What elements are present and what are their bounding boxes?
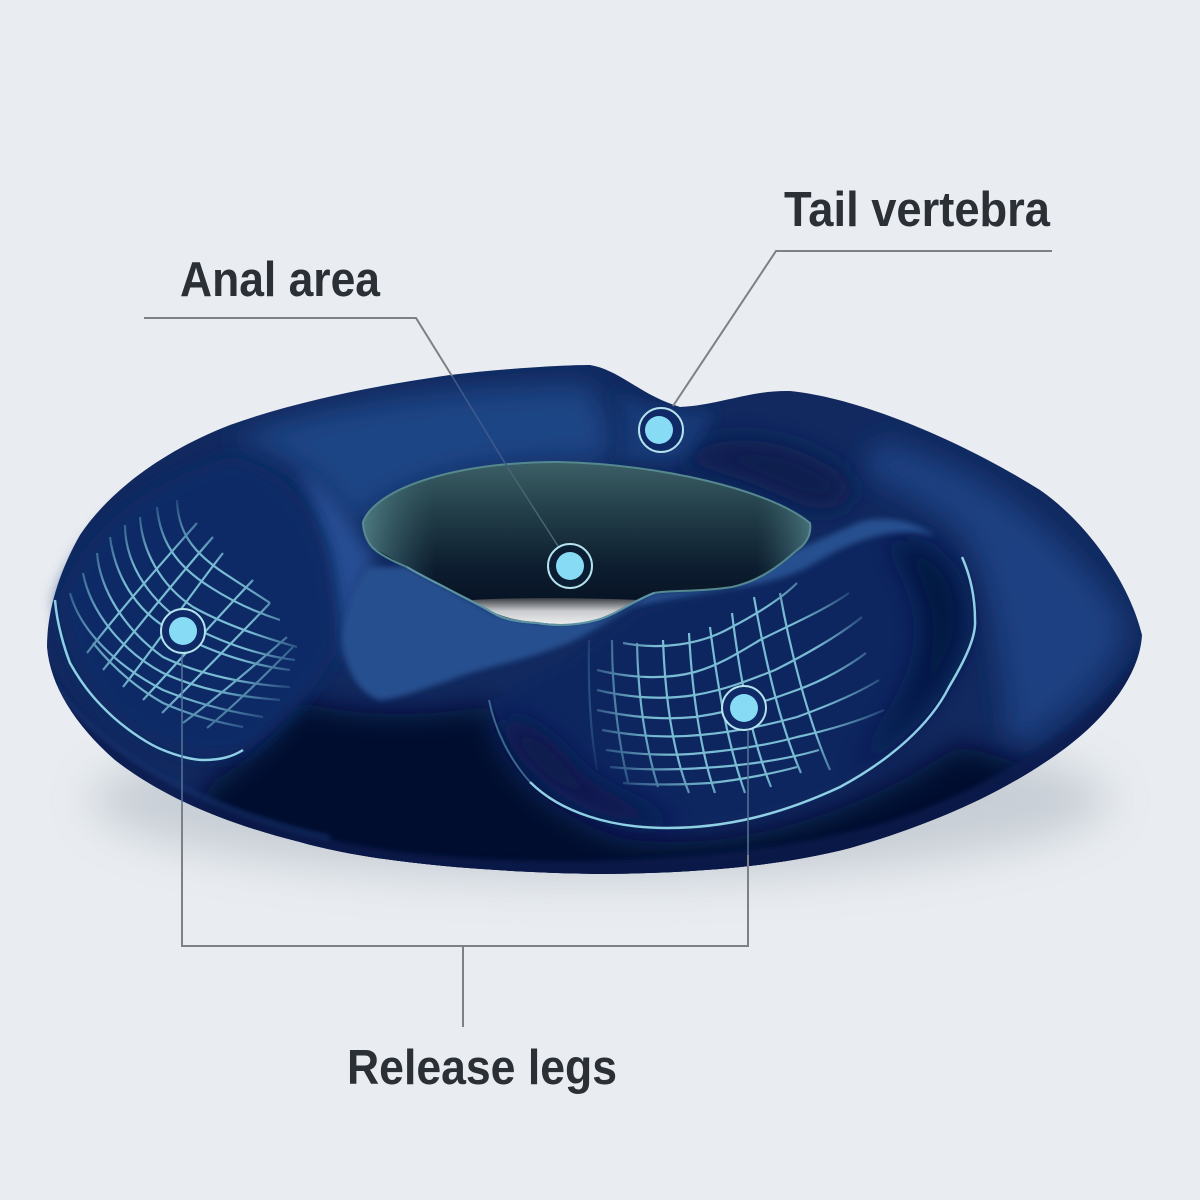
marker: anal area xyxy=(548,544,592,588)
tailbone notch xyxy=(618,394,712,466)
leader line: tail vertebra xyxy=(673,251,1052,406)
leader line: anal area inside opening xyxy=(508,468,558,546)
zipper band xyxy=(50,652,1140,874)
cushion xyxy=(47,365,1142,900)
leader line: anal area over cushion xyxy=(452,376,508,468)
opening side glow xyxy=(363,462,810,623)
left pad outline xyxy=(55,600,243,760)
dark valley right of tailbone xyxy=(680,440,852,509)
right hollow xyxy=(492,531,974,828)
front centre ridge xyxy=(342,519,936,700)
right pressure grid xyxy=(589,583,884,793)
bright left saddle xyxy=(300,470,375,670)
right pad outline xyxy=(530,557,975,828)
leader stem: release legs xyxy=(462,946,464,1027)
cushion shading xyxy=(47,385,1142,900)
anal area opening xyxy=(363,462,810,625)
dark lower front xyxy=(189,692,1036,874)
label: anal area: Anal area xyxy=(180,253,381,307)
left pressure grid xyxy=(70,500,297,728)
infographic canvas xyxy=(46,190,1142,1094)
opening wall xyxy=(363,462,810,625)
right hollow dark crescent xyxy=(850,540,963,775)
ground shadow xyxy=(90,720,1110,880)
marker: left leg xyxy=(161,609,205,653)
right hollow lower dark xyxy=(495,719,680,828)
marker: right leg xyxy=(722,686,766,730)
leader line: release legs over right pad xyxy=(747,730,749,855)
leader line: release legs over left pad xyxy=(181,654,183,805)
leader line: anal area xyxy=(144,318,452,376)
right pad outline faint start xyxy=(489,700,530,782)
seam highlight xyxy=(55,685,330,838)
opening lower rim xyxy=(407,567,654,625)
leader line: release legs xyxy=(182,805,748,946)
bright upper left rim xyxy=(230,385,611,530)
marker: tail vertebra xyxy=(639,408,683,452)
label: release legs: Release legs xyxy=(347,1041,617,1095)
cushion silhouette xyxy=(47,365,1142,874)
opening floor xyxy=(472,598,640,624)
bright right shoulder xyxy=(860,440,1125,750)
label: tail vertebra: Tail vertebra xyxy=(784,183,1051,237)
left hollow xyxy=(58,457,338,757)
